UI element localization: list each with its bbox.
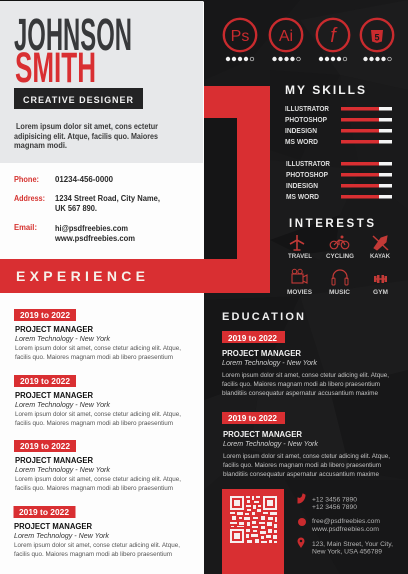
experience item 3: Lorem Technology - New York bbox=[15, 465, 111, 474]
contact block: phone: +12 3456 7890 bbox=[312, 504, 357, 511]
education item 2: blanditiis consequatur aspernatur accusantium maxime bbox=[223, 471, 380, 478]
QR code bbox=[230, 496, 277, 543]
job title badge: CREATIVE DESIGNER bbox=[23, 95, 134, 105]
contact block: web: free@psdfreebies.com bbox=[312, 518, 381, 525]
skills chart group 2: MS WORD bbox=[286, 194, 319, 201]
experience item 4: PROJECT MANAGER bbox=[14, 522, 92, 531]
education item 1: Lorem Technology - New York bbox=[222, 358, 318, 367]
title: last name: SMITH bbox=[15, 44, 96, 92]
intro text bbox=[14, 122, 158, 150]
icon: phone bbox=[298, 494, 305, 503]
software icons row bbox=[224, 19, 393, 61]
experience item 1: facilis quo. Maiores magnam modi ab libero praesentium bbox=[15, 354, 173, 361]
education item 1: Lorem ipsum dolor sit amet, conse ctetur adicing elit. Atque, bbox=[222, 372, 389, 379]
skills chart group 1 bbox=[285, 106, 392, 146]
QR code panel bbox=[222, 489, 284, 574]
icon: Illustrator bbox=[270, 19, 302, 61]
contact details: Email: bbox=[14, 223, 37, 232]
experience item 4: 2019 to 2022 bbox=[19, 508, 69, 517]
experience item 4: Lorem Technology - New York bbox=[14, 531, 110, 540]
icon: Flash bbox=[317, 19, 349, 61]
contact block: phone: +12 3456 7890 bbox=[312, 496, 357, 504]
experience item 1: Lorem Technology - New York bbox=[15, 334, 111, 343]
contact block: phone bbox=[298, 494, 357, 511]
icon: kayak: KAYAK bbox=[370, 253, 390, 260]
experience item 3: facilis quo. Maiores magnam modi ab libero praesentium bbox=[15, 485, 173, 492]
panel: header grey block bbox=[0, 1, 203, 163]
contact block: web: www.psdfreebies.com bbox=[311, 526, 380, 533]
education item 2: 2019 to 2022 bbox=[228, 414, 277, 423]
heading: education: EDUCATION bbox=[222, 311, 304, 323]
skills chart group 2: INDESIGN bbox=[286, 183, 318, 190]
contact details: 1234 Street Road, City Name, bbox=[55, 194, 160, 203]
experience banner bbox=[0, 259, 237, 293]
contact details: Address: bbox=[14, 194, 45, 203]
red L-shaped bracket bbox=[204, 86, 270, 293]
experience item 3: Lorem ipsum dolor sit amet, conse ctetur adicing elit. Atque, bbox=[15, 476, 181, 483]
interests grid bbox=[287, 235, 390, 296]
contact details: Phone: bbox=[14, 175, 39, 184]
experience item 4: facilis quo. Maiores magnam modi ab libero praesentium bbox=[14, 551, 172, 558]
icon: globe bbox=[298, 518, 306, 526]
intro text: Lorem ipsum dolor sit amet, cons ectetur bbox=[16, 122, 158, 131]
icon: Flash: f bbox=[330, 25, 338, 47]
education item 2 bbox=[222, 412, 390, 478]
education item 2: facilis quo. Maiores magnam modi ab libero praesentium bbox=[223, 462, 381, 469]
skills chart group 2: PHOTOSHOP bbox=[286, 172, 328, 179]
experience item 1: PROJECT MANAGER bbox=[15, 325, 93, 334]
experience item 4: Lorem ipsum dolor sit amet, conse ctetur adicing elit. Atque, bbox=[14, 542, 180, 549]
experience item 1: 2019 to 2022 bbox=[20, 311, 70, 320]
contact details bbox=[14, 175, 160, 243]
intro text: magnam modi. bbox=[14, 141, 67, 150]
skills chart group 2: ILLUSTRATOR bbox=[286, 161, 330, 168]
heading: my skills: MY SKILLS bbox=[285, 83, 365, 97]
education item 2: PROJECT MANAGER bbox=[223, 430, 302, 439]
icon: travel: TRAVEL bbox=[288, 253, 312, 260]
contact details: UK 567 890. bbox=[55, 204, 97, 213]
education item 2: Lorem Technology - New York bbox=[223, 439, 319, 448]
experience item 2 bbox=[14, 375, 181, 427]
experience banner: EXPERIENCE bbox=[16, 268, 145, 284]
education item 1: blanditiis consequatur aspernatur accusantium maxime bbox=[222, 390, 379, 397]
experience item 1: Lorem ipsum dolor sit amet, conse ctetur adicing elit. Atque, bbox=[15, 345, 181, 352]
panel: left white page bbox=[0, 0, 204, 574]
icon: Photoshop: Ps bbox=[231, 28, 249, 45]
icon: Photoshop bbox=[224, 19, 256, 61]
contact block: web bbox=[298, 518, 381, 533]
contact details: www.psdfreebies.com bbox=[54, 234, 135, 243]
skills chart group 1: ILLUSTRATOR bbox=[285, 106, 329, 113]
intro text: adipisicing elit. Atque, facilis quo. Maiores bbox=[14, 132, 158, 141]
title: first name: JOHNSON bbox=[14, 9, 132, 60]
icon: gym: GYM bbox=[373, 289, 388, 296]
contact block: address: New York, USA 456789 bbox=[312, 548, 382, 556]
icon: HTML5: 5 bbox=[374, 32, 380, 42]
experience item 2: facilis quo. Maiores magnam modi ab libero praesentium bbox=[15, 420, 173, 427]
experience item 2: Lorem ipsum dolor sit amet, conse ctetur adicing elit. Atque, bbox=[15, 411, 181, 418]
skills chart group 1: PHOTOSHOP bbox=[285, 117, 327, 124]
education item 1: PROJECT MANAGER bbox=[222, 349, 301, 358]
experience item 2: PROJECT MANAGER bbox=[15, 391, 93, 400]
icon: Illustrator: Ai bbox=[279, 28, 293, 45]
icon: music: MUSIC bbox=[329, 289, 350, 296]
contact block: address bbox=[298, 538, 393, 556]
experience item 4 bbox=[14, 506, 180, 558]
icon: cycling: CYCLING bbox=[326, 253, 354, 260]
education item 2: Lorem ipsum dolor sit amet, conse ctetur adicing elit. Atque, bbox=[223, 453, 390, 460]
icon: HTML5 bbox=[361, 19, 393, 61]
skills chart group 2 bbox=[286, 161, 392, 201]
education item 1 bbox=[222, 331, 389, 397]
experience item 1 bbox=[14, 309, 181, 361]
heading: interests: INTERESTS bbox=[289, 218, 374, 230]
panel: right dark low-poly background bbox=[204, 0, 408, 574]
top black strip bbox=[0, 0, 204, 2]
experience item 3: 2019 to 2022 bbox=[20, 442, 70, 451]
education item 1: facilis quo. Maiores magnam modi ab libero praesentium bbox=[222, 381, 380, 388]
job title badge bbox=[14, 88, 143, 109]
experience item 2: Lorem Technology - New York bbox=[15, 400, 111, 409]
experience item 3: PROJECT MANAGER bbox=[15, 456, 93, 465]
experience item 2: 2019 to 2022 bbox=[20, 377, 70, 386]
icon: pin bbox=[298, 538, 304, 548]
icon: movies: MOVIES bbox=[287, 289, 313, 296]
skills chart group 1: MS WORD bbox=[285, 139, 318, 146]
contact details: 01234-456-0000 bbox=[55, 175, 114, 184]
contact details: hi@psdfreebies.com bbox=[55, 224, 128, 233]
contact block: address: 123, Main Street, Your City, bbox=[312, 541, 393, 548]
education item 1: 2019 to 2022 bbox=[228, 334, 277, 343]
skills chart group 1: INDESIGN bbox=[285, 128, 317, 135]
experience item 3 bbox=[14, 440, 181, 492]
